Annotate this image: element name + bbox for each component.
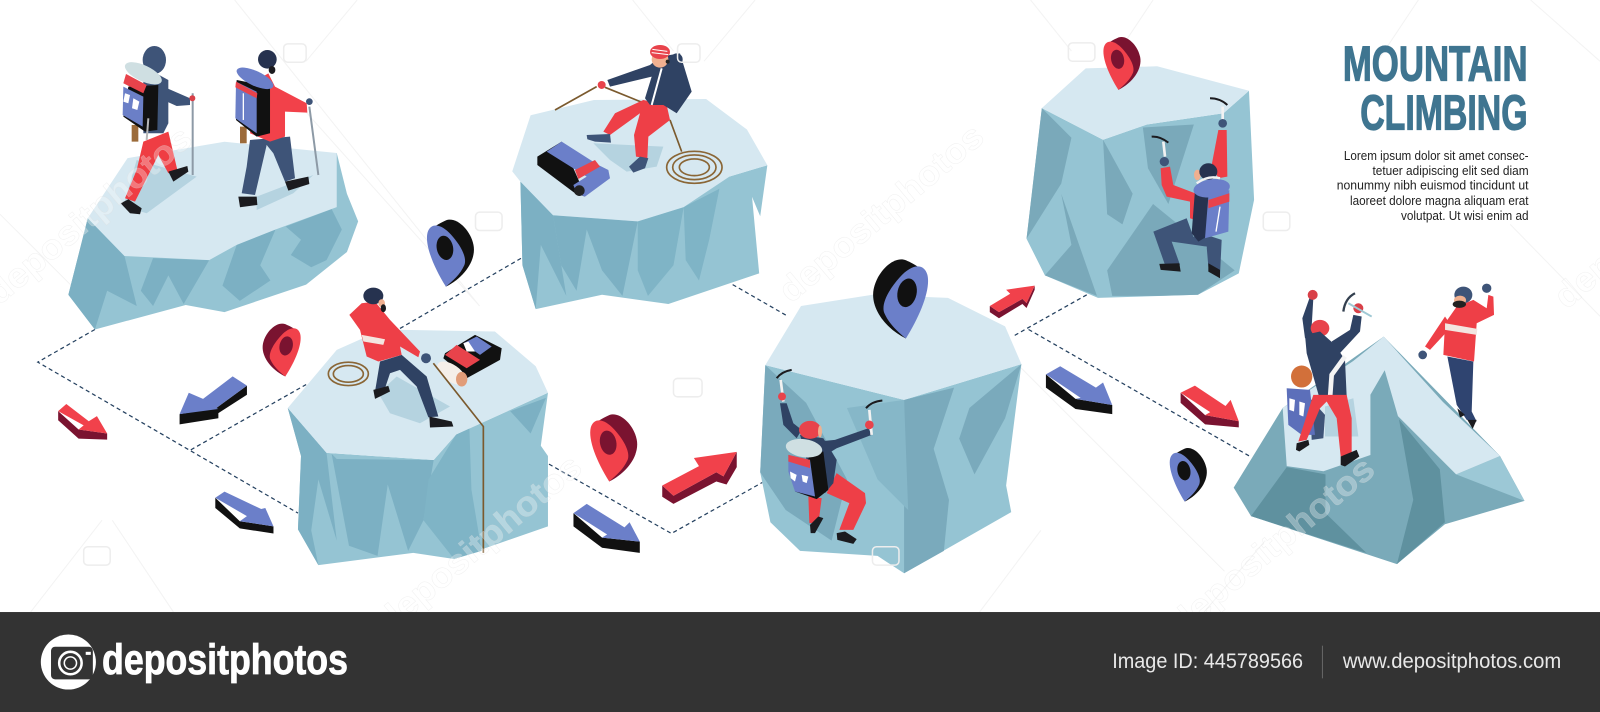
footer bar: www.depositphotos.com: [1342, 649, 1561, 673]
arrow: red right: [1181, 386, 1239, 427]
ice block 2: [512, 99, 767, 309]
pin: red on block 5: [1103, 37, 1141, 90]
climber F: summit celebration pair: [1287, 284, 1494, 467]
pin: red middle: [590, 414, 637, 481]
body text: volutpat. Ut wisi enim ad: [1401, 208, 1529, 223]
ice block 1: [68, 142, 358, 329]
body text: Lorem ipsum dolor sit amet consec-: [1344, 148, 1529, 163]
pin: blue small: [1170, 448, 1207, 502]
climber B: rope puller with gear on block 2: [537, 45, 722, 197]
arrow: small blue: [215, 492, 273, 533]
watermarks: depositphotos: [1162, 450, 1382, 643]
ice block 5: [1027, 66, 1254, 298]
arrow: blue right: [1046, 366, 1112, 414]
footer bar: [0, 612, 1600, 712]
pin: red small: [263, 324, 301, 377]
climber C: rope belayer with gear on block 3: [328, 288, 502, 553]
watermarks: [0, 117, 1600, 643]
footer logo icon: [41, 634, 96, 690]
route: dashed path lines: [38, 258, 1251, 533]
body text: laoreet dolore magna aliquam erat: [1350, 193, 1529, 208]
watermarks: depositphotos: [772, 117, 991, 310]
ice block 4: [760, 295, 1021, 573]
climber E: climber with ice axes on block 5: [1152, 98, 1231, 278]
arrow: small red: [58, 404, 107, 440]
arrow: small red upper: [990, 286, 1035, 318]
body text: tetuer adipiscing elit sed diam: [1372, 163, 1529, 178]
body text: nonummy nibh euismod tincidunt ut: [1337, 178, 1529, 193]
arrow: big red: [662, 452, 737, 504]
body text: [1337, 148, 1529, 223]
climbers A: two hikers on block 1: [121, 46, 318, 214]
title: CLIMBING: [1360, 87, 1528, 141]
title: MOUNTAIN: [1343, 38, 1528, 92]
pin: blue large near block 1: [427, 220, 474, 287]
ice block 6: summit: [1234, 337, 1524, 564]
footer bar: Image ID: 445789566: [1112, 649, 1303, 673]
pin: blue on block 4: [873, 259, 928, 339]
arrow: big blue: [180, 376, 247, 424]
arrow: blue to block 4: [573, 504, 640, 553]
watermarks: depositphotos: [369, 448, 589, 641]
ice block 3: [288, 329, 548, 565]
watermark camera marks: [84, 43, 1290, 565]
footer bar: depositphotos: [102, 636, 348, 684]
title: [1343, 38, 1528, 141]
climber D: climber with ice axes on block 4: [777, 370, 882, 544]
